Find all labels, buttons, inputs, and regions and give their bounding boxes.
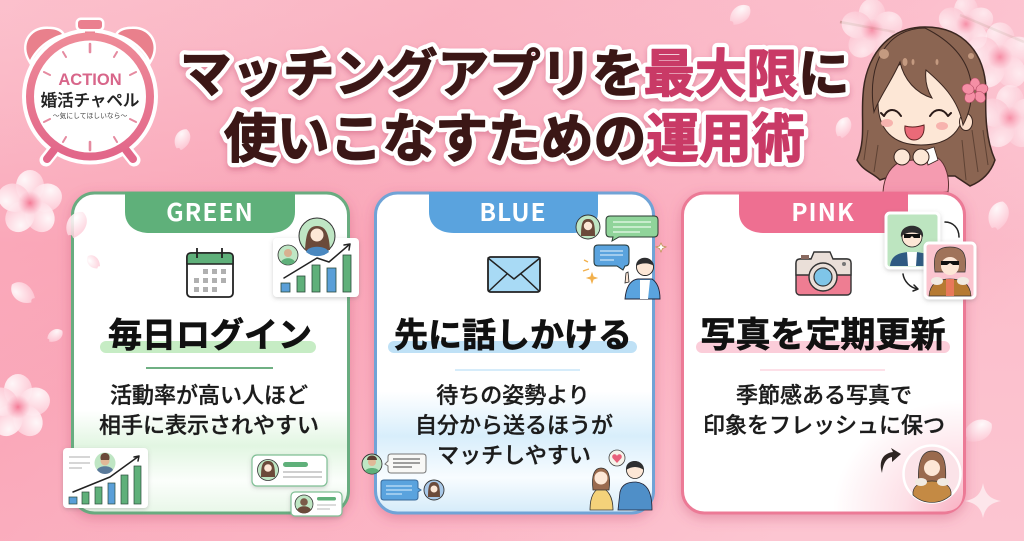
character: smiling girl <box>857 27 995 192</box>
green heading: 毎日ログイン <box>108 317 312 355</box>
avatar <box>904 446 960 502</box>
growth chart bottom left <box>63 448 148 508</box>
arrow <box>881 448 901 473</box>
title <box>180 45 850 169</box>
icon: envelope <box>488 257 540 292</box>
title fill: マッチングアプリを最大限に <box>180 45 850 103</box>
hair highlights <box>879 49 974 66</box>
panel: green <box>63 192 359 516</box>
title fill <box>180 45 850 169</box>
title outline <box>180 45 850 169</box>
logo: alarm clock <box>22 20 158 164</box>
hair back <box>857 27 995 186</box>
pink tab label: PINK <box>791 194 855 229</box>
bangs <box>872 28 972 125</box>
title fill: 使いこなすための運用術 <box>224 110 805 169</box>
green description <box>99 383 319 438</box>
blue description: 自分から送るほうが <box>415 413 613 438</box>
panel: blue <box>362 192 666 513</box>
growth chart top right <box>273 218 359 297</box>
blue description: マッチしやすい <box>437 443 591 468</box>
ear <box>960 114 972 130</box>
logo text: ACTION <box>58 71 122 89</box>
chat and man illustration <box>576 215 666 299</box>
green tab label: GREEN <box>166 194 254 229</box>
clock face <box>30 36 150 156</box>
blue tab label: BLUE <box>479 194 547 229</box>
mouth <box>905 125 924 140</box>
couple illustration <box>590 450 652 510</box>
green tab <box>125 192 295 233</box>
blue tab <box>429 192 598 233</box>
logo text <box>41 71 139 120</box>
eyes <box>881 110 951 116</box>
blue heading: 先に話しかける <box>394 317 632 355</box>
pink divider <box>760 369 885 371</box>
pink description <box>703 383 945 438</box>
hair flower <box>961 78 989 105</box>
profile card large <box>252 455 327 486</box>
pink tab <box>739 192 908 233</box>
petals over the green card <box>62 208 102 271</box>
hands <box>894 149 910 165</box>
green description: 活動率が高い人ほど <box>110 383 308 408</box>
logo text: 〜気にしてほしいなら〜 <box>53 111 127 120</box>
chat bubbles bottom left <box>362 454 444 500</box>
clock ticks <box>44 44 136 150</box>
blue divider <box>455 369 580 371</box>
green description: 相手に表示されやすい <box>99 413 319 438</box>
body <box>883 158 949 192</box>
icon: calendar <box>187 248 233 297</box>
pink heading: 写真を定期更新 <box>700 316 946 355</box>
pink description: 季節感ある写真で <box>736 383 912 408</box>
pink corner tint <box>810 380 963 512</box>
hair strands <box>864 130 988 180</box>
blue description: 待ちの姿勢より <box>436 383 590 408</box>
blue description <box>415 383 613 468</box>
logo text: 婚活チャペル <box>41 91 139 110</box>
clock white backing <box>22 28 158 164</box>
icon: camera <box>796 252 851 295</box>
green card <box>72 193 348 513</box>
sparkle <box>965 483 1001 518</box>
blue card <box>376 193 654 513</box>
green divider <box>146 367 273 369</box>
title outline: 使いこなすための運用術 <box>224 110 805 169</box>
title outline: マッチングアプリを最大限に <box>180 45 850 103</box>
panel: pink <box>682 192 975 513</box>
clock bells <box>26 20 154 160</box>
pink description: 印象をフレッシュに保つ <box>703 413 945 438</box>
face <box>878 60 964 145</box>
pink card <box>682 193 964 513</box>
before and after photos <box>886 213 975 298</box>
cheeks <box>881 119 893 127</box>
profile card small <box>291 492 342 516</box>
collar <box>925 147 938 165</box>
